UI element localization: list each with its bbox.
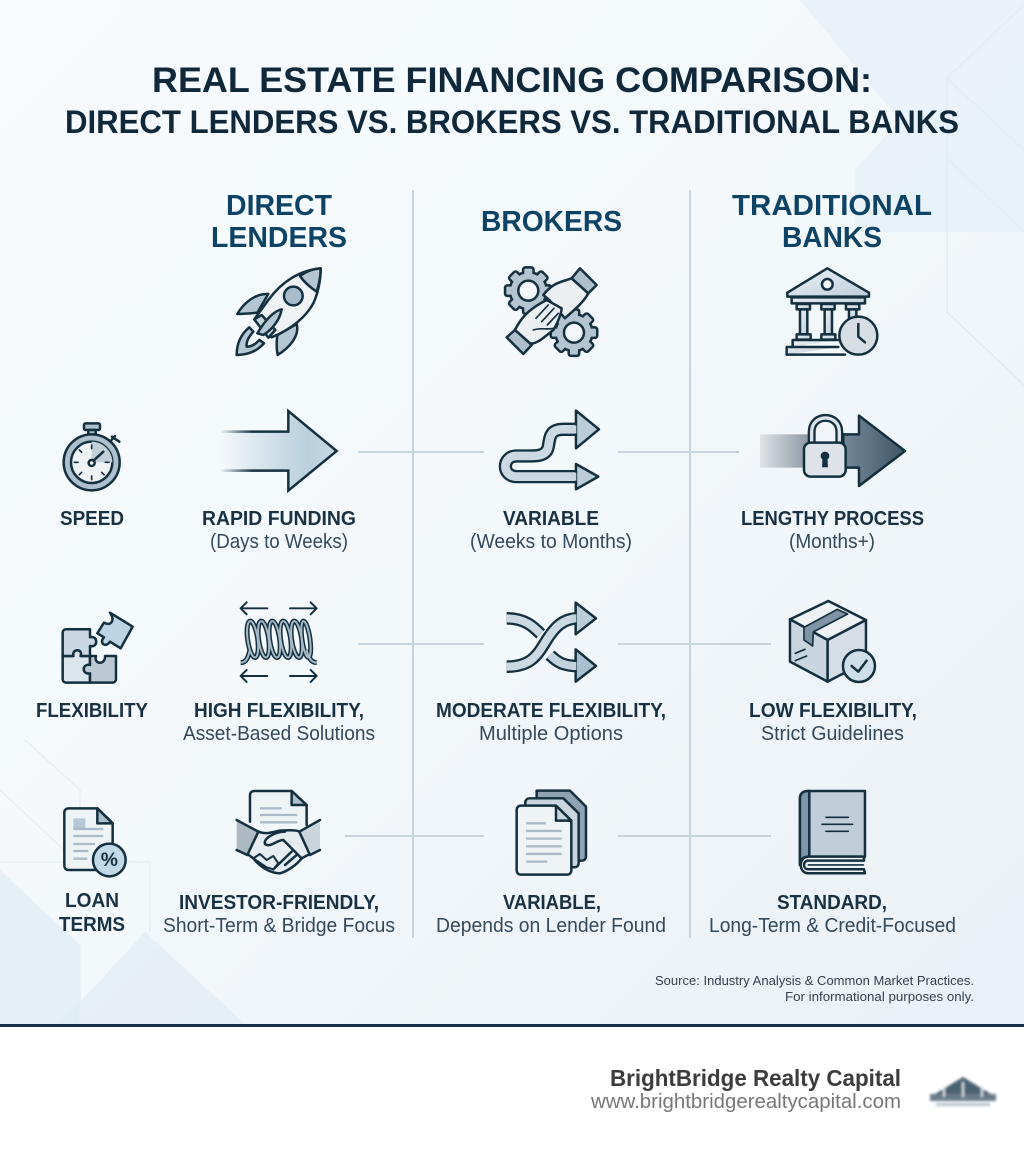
text: moderate flexibility [436,700,666,745]
icon: locked arrow [760,416,905,486]
column dividers and row connectors [345,190,771,938]
heading: direct lenders [211,190,347,254]
source note: For informational purposes only. [785,989,974,1004]
icon: crossing arrows [507,603,596,682]
text: variable terms: Depends on Lender Found [436,915,666,937]
text: investor-friendly: INVESTOR-FRIENDLY, [179,892,379,914]
text: lengthy process: (Months+) [789,531,875,553]
icon: document stack [517,791,586,875]
text: standard: STANDARD, [777,892,887,914]
footer brand text: BrightBridge Realty Capital [610,1065,901,1091]
footer brand text [590,1065,901,1113]
text: variable speed [470,508,632,553]
text: variable speed: VARIABLE [503,508,599,530]
icon: box with check [790,601,875,682]
source note: Source: Industry Analysis & Common Market Practices. [655,973,974,988]
text: standard [709,892,956,937]
label: loan terms: TERMS [59,914,125,936]
text: lengthy process [741,508,924,553]
text: investor-friendly: Short-Term & Bridge Focus [163,915,395,937]
text: rapid funding [202,508,356,553]
title [65,61,959,140]
text: moderate flexibility: MODERATE FLEXIBILITY, [436,700,666,722]
heading: traditional banks: TRADITIONAL [732,190,932,222]
title: REAL ESTATE FINANCING COMPARISON: [152,61,872,100]
text: variable speed: (Weeks to Months) [470,531,632,553]
heading: brokers: BROKERS [481,206,622,238]
icon: document with percent [64,808,126,876]
text: variable terms: VARIABLE, [503,892,601,914]
text: high flexibility: Asset-Based Solutions [183,723,375,745]
text: high flexibility [183,700,375,745]
icon: winding arrows [505,411,599,489]
heading: direct lenders: LENDERS [211,222,347,254]
text: high flexibility: HIGH FLEXIBILITY, [194,700,364,722]
heading: traditional banks [732,190,932,254]
text: low flexibility: Strict Guidelines [761,723,904,745]
footer bar [0,1024,1024,1154]
heading: direct lenders: DIRECT [226,190,332,222]
label: flexibility: FLEXIBILITY [36,700,149,722]
icon: spring with arrows [241,602,317,682]
text: variable terms [436,892,666,937]
icon: handshake with document [237,791,320,873]
text: investor-friendly [163,892,395,937]
text: standard: Long-Term & Credit-Focused [709,915,956,937]
source note [655,973,974,1004]
heading: traditional banks: BANKS [782,222,882,254]
label: loan terms: LOAN [65,890,119,912]
icon: rocket [237,268,321,355]
icon: book [800,791,865,873]
icon: fast arrow [220,411,337,491]
icon: document with percent: % [101,850,118,871]
text: moderate flexibility: Multiple Options [479,723,623,745]
text: rapid funding: RAPID FUNDING [202,508,356,530]
logo [930,1077,996,1106]
icon: bank with clock [787,268,877,355]
footer brand text: www.brightbridgerealtycapital.com [590,1091,901,1113]
label: speed: SPEED [60,508,124,530]
title: DIRECT LENDERS VS. BROKERS VS. TRADITIONAL BANKS [65,104,959,140]
text: lengthy process: LENGTHY PROCESS [741,508,924,530]
text: low flexibility: LOW FLEXIBILITY, [749,700,917,722]
icon: stopwatch [64,423,120,490]
text: low flexibility [749,700,917,745]
icon: gears and hands [506,268,597,355]
text: rapid funding: (Days to Weeks) [210,531,348,553]
label: loan terms [59,890,125,936]
icon: puzzle [63,613,133,683]
